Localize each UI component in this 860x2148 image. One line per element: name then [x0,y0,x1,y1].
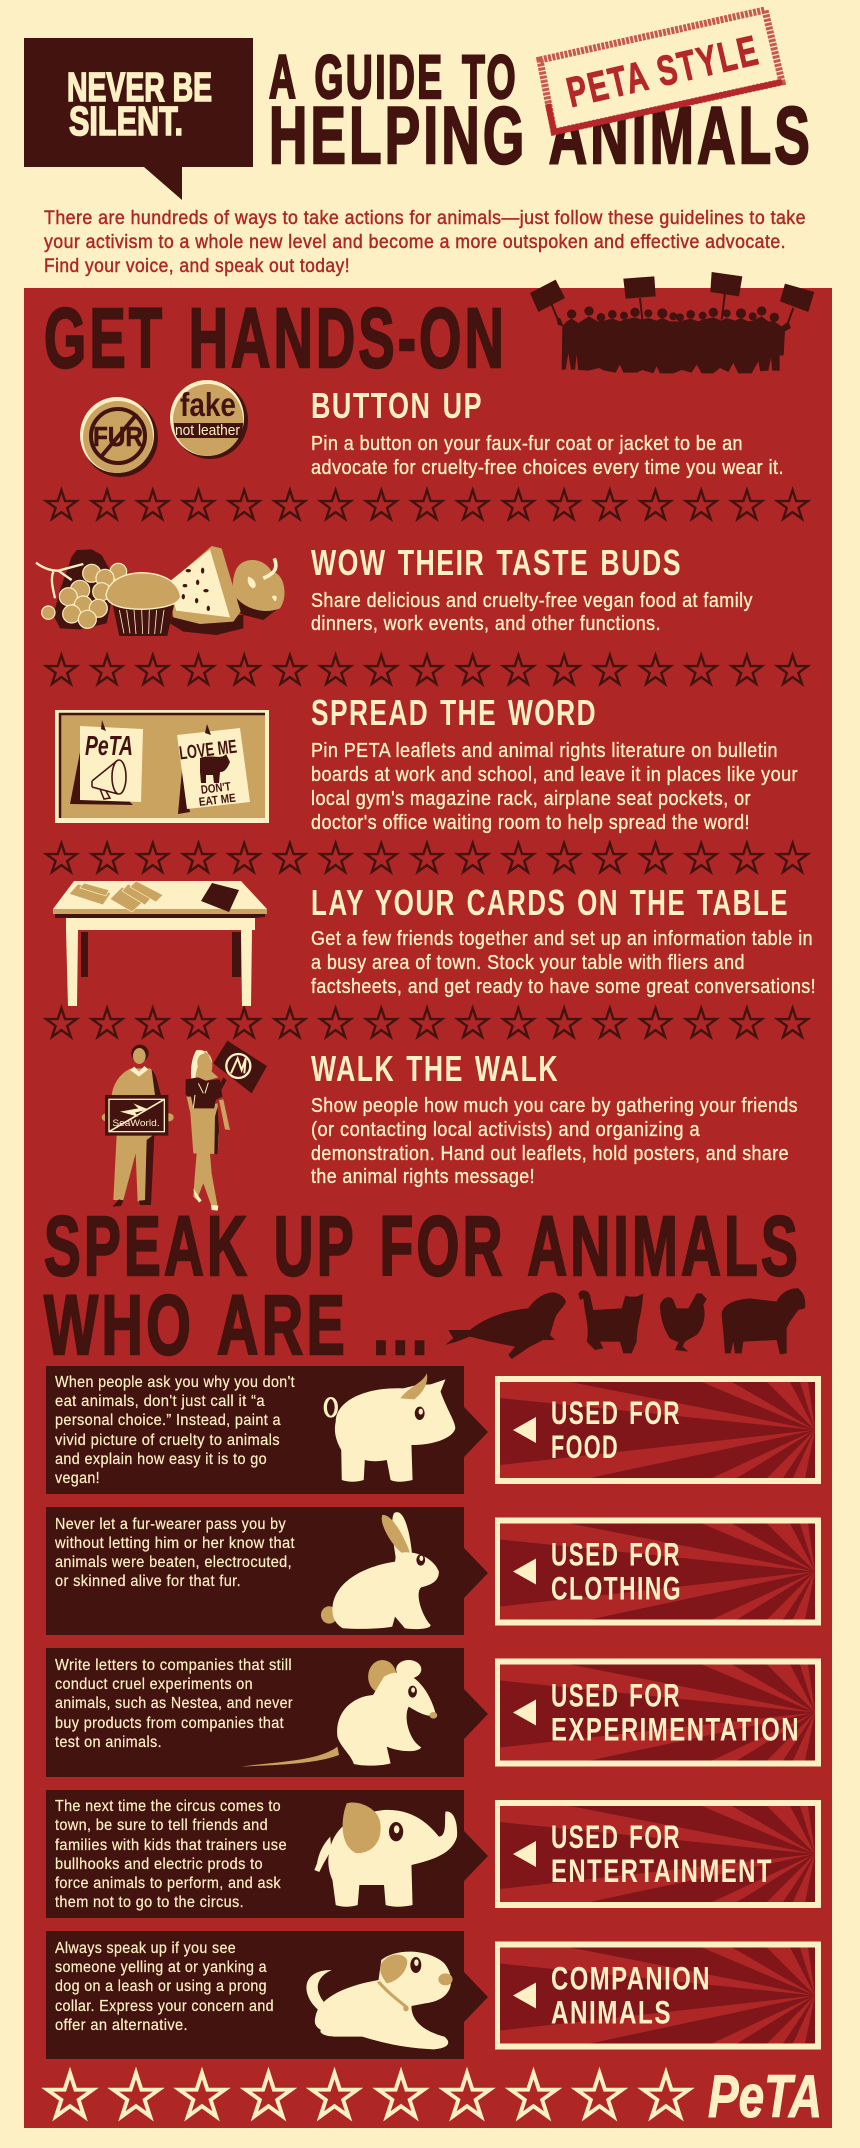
panel: companion tip [46,1931,488,2059]
speech bubble: never be silent: SILENT. [69,98,183,144]
panel: companion tip: collar. Express your concern and [55,1998,274,2015]
panel: food tip: vivid picture of cruelty to animals [55,1432,280,1449]
heading: get hands-on: GET HANDS-ON [44,291,507,385]
icon: information table [53,881,267,1006]
intro text [44,207,806,277]
text: spread the word: local gym's magazine rack, airplane seat pockets, or [311,787,751,810]
leaflet: love me: EAT ME [198,791,236,809]
muffin [106,573,181,636]
panel: companion tip: dog on a leash or using a prong [55,1978,267,1995]
box: used for food [495,1376,821,1484]
button: fake not leather: not leather [175,422,240,439]
panel: food tip: vegan! [55,1470,100,1487]
icon: rabbit [321,1512,439,1629]
text: wow their taste buds: dinners, work events, and other functions. [311,612,661,635]
speech bubble: never be silent [24,38,253,200]
panel: clothing tip: without letting him or her know that [54,1535,295,1552]
text: walk the walk: WALK THE WALK [311,1048,559,1089]
star divider 3 [46,843,808,872]
box: used for clothing: CLOTHING [551,1570,682,1606]
panel: clothing tip: or skinned alive for that fur. [55,1573,241,1590]
icon: pig [325,1373,455,1482]
footer stars [47,2073,689,2116]
icon: elephant [314,1802,457,1907]
box: used for clothing: USED FOR [551,1536,681,1572]
panel: experimentation tip: Write letters to companies that still [55,1657,292,1674]
heading: speak up for animals: WHO ARE ... [44,1278,431,1372]
row: used for clothing [46,1507,821,1635]
cards on table [69,881,163,912]
star divider 1 [46,490,808,519]
leaflet: peta [70,720,143,805]
row: used for food [46,1366,821,1494]
speech bubble: never be silent: NEVER BE [67,64,212,110]
text: spread the word: Pin PETA leaflets and animal rights literature on bulletin [311,739,778,762]
text: walk the walk: the animal rights message! [311,1165,535,1188]
grapes [36,549,127,629]
watermelon [168,546,243,635]
text: walk the walk [311,1048,798,1188]
leaflet: peta: PeTA [85,730,133,761]
star divider 4 [46,1008,808,1037]
text: lay your cards: a busy area of town. Stock your table with fliers and [311,951,745,974]
leaflet: love me: LOVE ME [178,737,238,764]
icon: buttons [80,380,248,477]
text: button up: BUTTON UP [311,385,483,426]
box: used for food: FOOD [551,1429,619,1465]
text: spread the word: doctor's office waiting room to help spread the word! [311,811,750,834]
panel: entertainment tip: force animals to perform, and ask [55,1875,282,1892]
icon: animal silhouettes [445,1288,805,1359]
panel: food tip: and explain how easy it is to go [55,1451,267,1468]
panel: food tip: When people ask you why you don't [55,1374,295,1391]
panel: entertainment tip: town, be sure to tell friends and [55,1817,268,1834]
title [269,43,813,181]
star divider 2 [46,655,808,684]
panel: food tip: eat animals, don't just call it “a [55,1393,265,1410]
text: spread the word: boards at work and school, and leave it in places like your [311,763,798,786]
panel: companion tip: someone yelling at or yanking a [55,1959,267,1976]
leaflet: love me [177,724,250,814]
intro text: Find your voice, and speak out today! [44,255,350,277]
text: walk the walk: (or contacting local activists) and organizing a [311,1118,700,1141]
box: used for entertainment: USED FOR [551,1819,681,1855]
text: wow their taste buds [311,542,753,635]
button: fake not leather: fake [180,386,236,423]
text: button up: Pin a button on your faux-fur coat or jacket to be an [311,432,743,455]
text: walk the walk: Show people how much you care by gathering your friends [311,1094,798,1117]
button: no fur [80,397,158,477]
text: spread the word [311,692,798,834]
box: used for clothing [495,1518,821,1626]
panel: experimentation tip: buy products from companies that [55,1715,284,1732]
box: used for entertainment [495,1800,821,1908]
box: used for food: USED FOR [551,1395,681,1431]
box: companion animals [495,1942,821,2050]
text: walk the walk: demonstration. Hand out leaflets, hold posters, and share [311,1142,789,1165]
text: wow their taste buds: Share delicious and cruelty-free vegan food at family [311,589,753,612]
icon: dog [306,1952,453,2049]
stamp: peta style: PETA STYLE [562,26,764,116]
panel: food tip: personal choice.” Instead, paint a [55,1412,281,1429]
box: used for experimentation [495,1658,821,1766]
panel: entertainment tip [46,1790,488,1918]
icon: mouse [241,1660,437,1767]
text: button up [311,385,784,479]
button: fake not leather [170,380,248,459]
woman with flag [186,1041,267,1211]
panel: experimentation tip: conduct cruel experiments on [55,1676,253,1693]
panel: entertainment tip: families with kids that trainers use [55,1837,287,1854]
leaflet: love me: DON'T [200,779,232,797]
panel: clothing tip: Never let a fur-wearer pass you by [55,1516,286,1533]
panel: clothing tip [46,1507,488,1635]
icon: vegan food [36,546,285,636]
row: companion animals [46,1931,821,2059]
panel: experimentation tip: test on animals. [55,1734,162,1751]
button: no fur: FUR [93,421,143,452]
box: companion animals: COMPANION [551,1960,711,1996]
text: spread the word: SPREAD THE WORD [311,692,597,733]
panel: entertainment tip: The next time the circus comes to [55,1798,281,1815]
panel: companion tip: offer an alternative. [55,2017,188,2034]
box: used for entertainment: ENTERTAINMENT [551,1853,773,1889]
heading: speak up for animals [44,1199,801,1372]
box: used for experimentation: USED FOR [551,1678,681,1714]
intro text: your activism to a whole new level and become a more outspoken and effective advocate. [44,231,786,253]
pepper [230,558,285,620]
row: used for entertainment [46,1790,821,1918]
peta logo: PeTA [708,2063,822,2130]
panel: clothing tip: animals were beaten, electrocuted, [55,1554,292,1571]
intro text: There are hundreds of ways to take actions for animals—just follow these guidelines to take [44,207,806,229]
leaflet stack [201,883,239,912]
text: lay your cards [311,882,816,998]
panel: experimentation tip: animals, such as Nestea, and never [55,1695,293,1712]
title: A GUIDE TO [269,43,518,111]
stamp: peta style [540,10,782,132]
box: companion animals: ANIMALS [551,1994,672,2030]
panel: experimentation tip [46,1648,488,1777]
panel: food tip [46,1366,488,1494]
icon: demonstrators [102,1041,267,1211]
man with sign [102,1045,174,1207]
icon: bulletin board [55,710,269,823]
man with sign: SeaWorld. [112,1118,160,1128]
panel: companion tip: Always speak up if you see [55,1940,236,1957]
panel: entertainment tip: them not to go to the circus. [55,1894,244,1911]
icon: protest crowd [530,272,814,373]
text: button up: advocate for cruelty-free choices every time you wear it. [311,456,784,479]
text: wow their taste buds: WOW THEIR TASTE BUDS [311,542,682,583]
panel: entertainment tip: bullhooks and electric prods to [55,1856,263,1873]
row: used for experimentation [46,1648,821,1777]
